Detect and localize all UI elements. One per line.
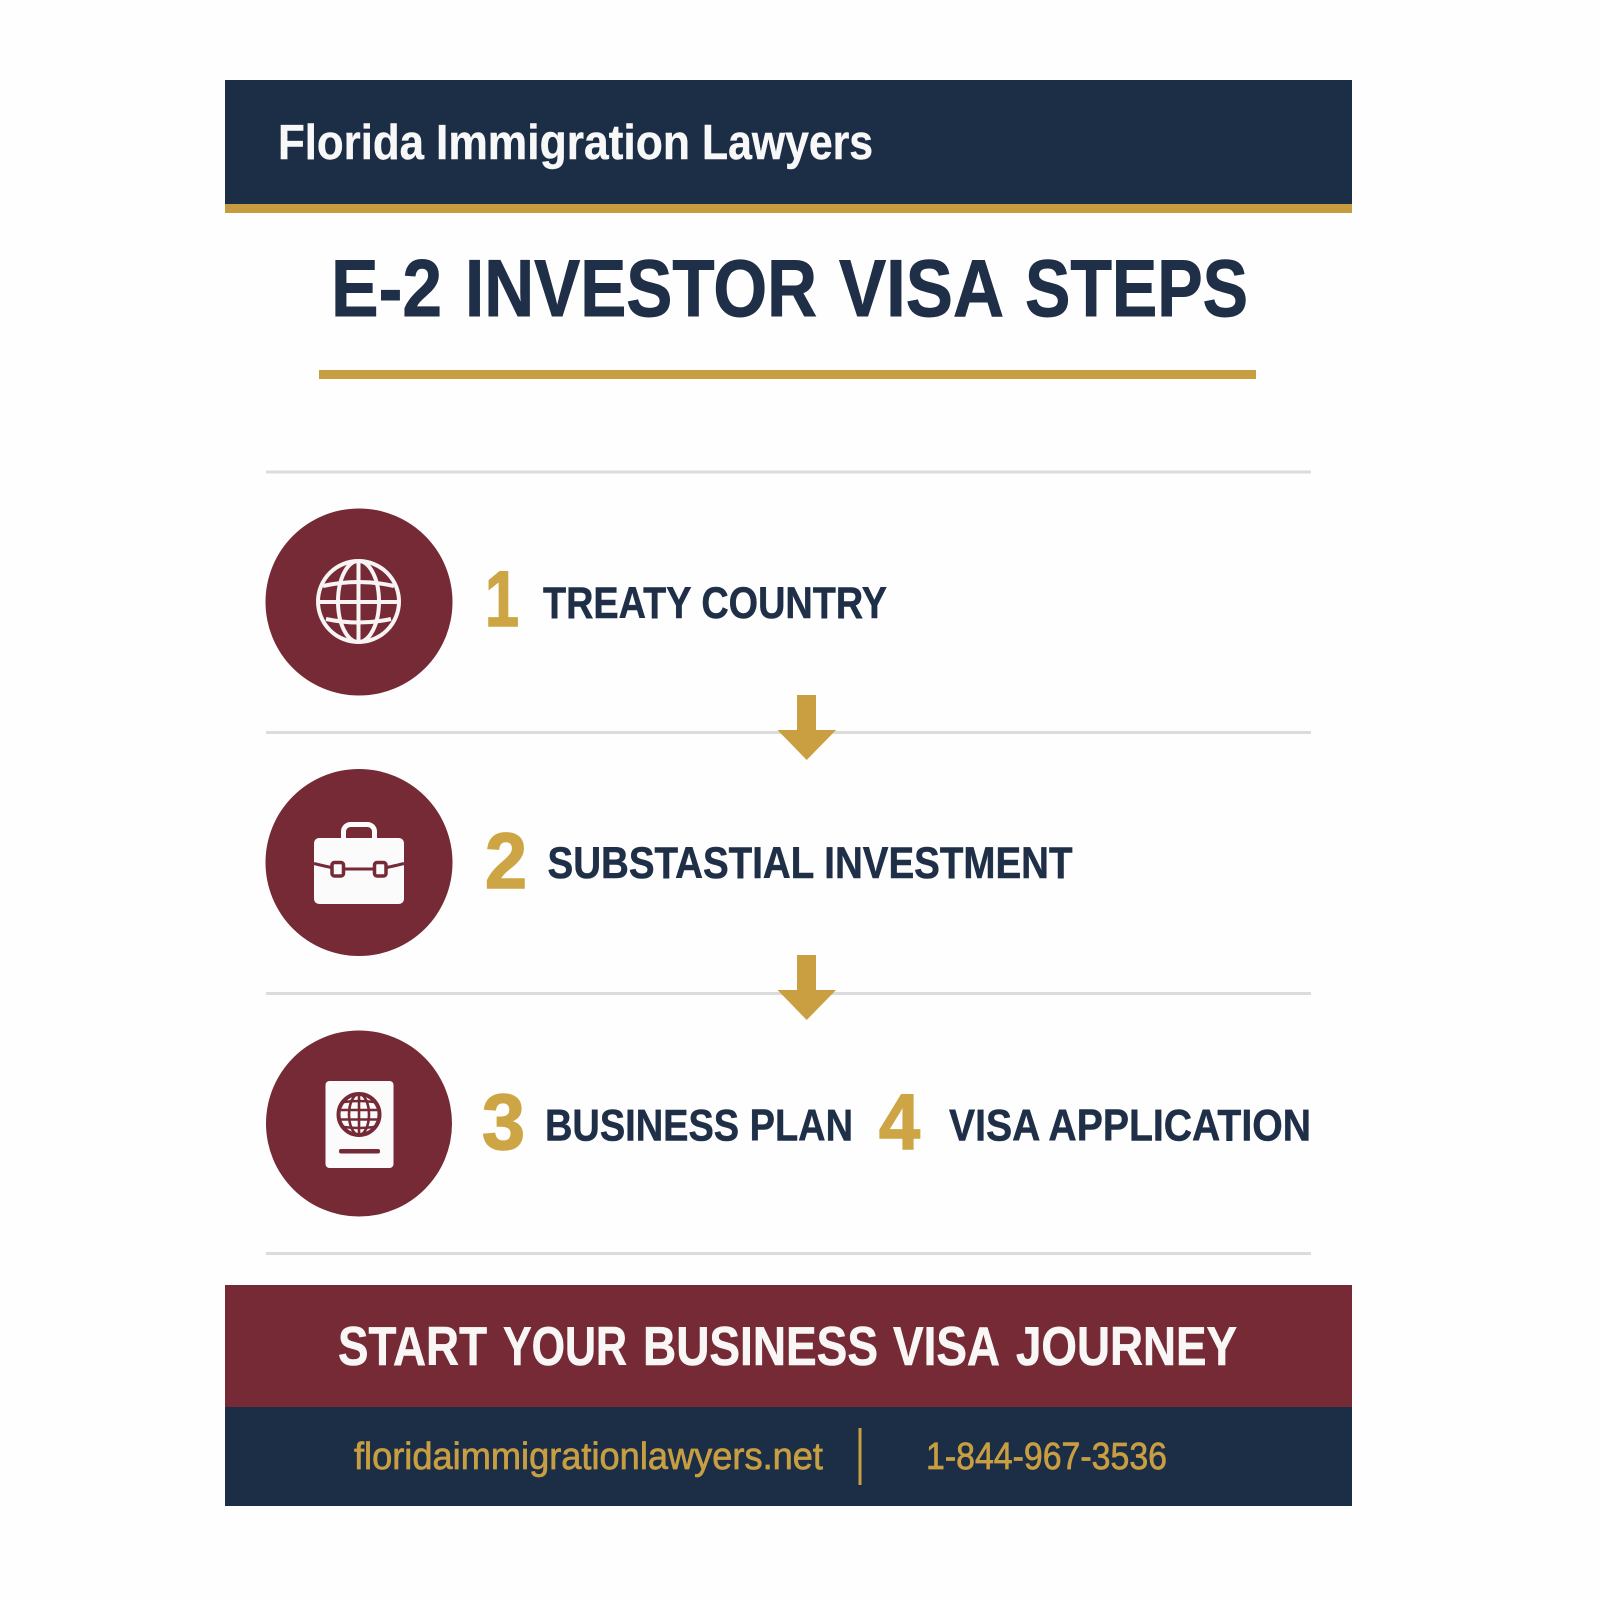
call to action text: VISA <box>893 1316 1000 1377</box>
call to action text <box>338 1316 1237 1377</box>
number 3: 3 <box>482 1077 525 1166</box>
number 1: 1 <box>485 554 519 643</box>
call to action text: JOURNEY <box>1016 1316 1237 1377</box>
title: STEPS <box>1025 244 1248 334</box>
label: visa application: VISA APPLICATION <box>949 1102 1311 1150</box>
header firm name <box>278 116 873 170</box>
step 2: substantial investment <box>266 769 1072 956</box>
header band <box>225 80 1352 213</box>
step 1: treaty country <box>266 508 887 696</box>
call to action text: YOUR <box>503 1316 627 1377</box>
number 2: 2 <box>485 816 527 905</box>
step 3 and 4: business plan, visa application <box>266 1030 1311 1216</box>
divider <box>858 1428 862 1485</box>
label: substastial investment: SUBSTASTIAL INVESTMENT <box>548 839 1072 888</box>
icon: globe <box>266 508 452 696</box>
call to action text: BUSINESS <box>643 1316 878 1377</box>
call to action banner <box>225 1285 1352 1407</box>
website: floridaimmigrationlawyers.net <box>354 1436 823 1478</box>
contact bar <box>225 1407 1352 1506</box>
title: E-2 <box>331 244 442 334</box>
header firm name: Immigration <box>436 116 690 170</box>
title: VISA <box>839 244 1004 334</box>
title <box>331 244 1248 334</box>
arrow 2 to 3 <box>778 955 836 1020</box>
title: INVESTOR <box>465 244 817 334</box>
phone number: 1-844-967-3536 <box>926 1436 1167 1478</box>
arrow 1 to 2 <box>778 695 836 760</box>
header firm name: Florida <box>278 116 425 170</box>
header firm name: Lawyers <box>702 116 873 170</box>
icon: passport <box>266 1030 452 1216</box>
call to action text: START <box>338 1316 487 1377</box>
label: treaty country: TREATY COUNTRY <box>543 579 887 628</box>
icon: briefcase <box>266 769 452 956</box>
title underline <box>319 370 1256 379</box>
number 4: 4 <box>879 1077 920 1166</box>
label: business plan: BUSINESS PLAN <box>545 1102 853 1150</box>
